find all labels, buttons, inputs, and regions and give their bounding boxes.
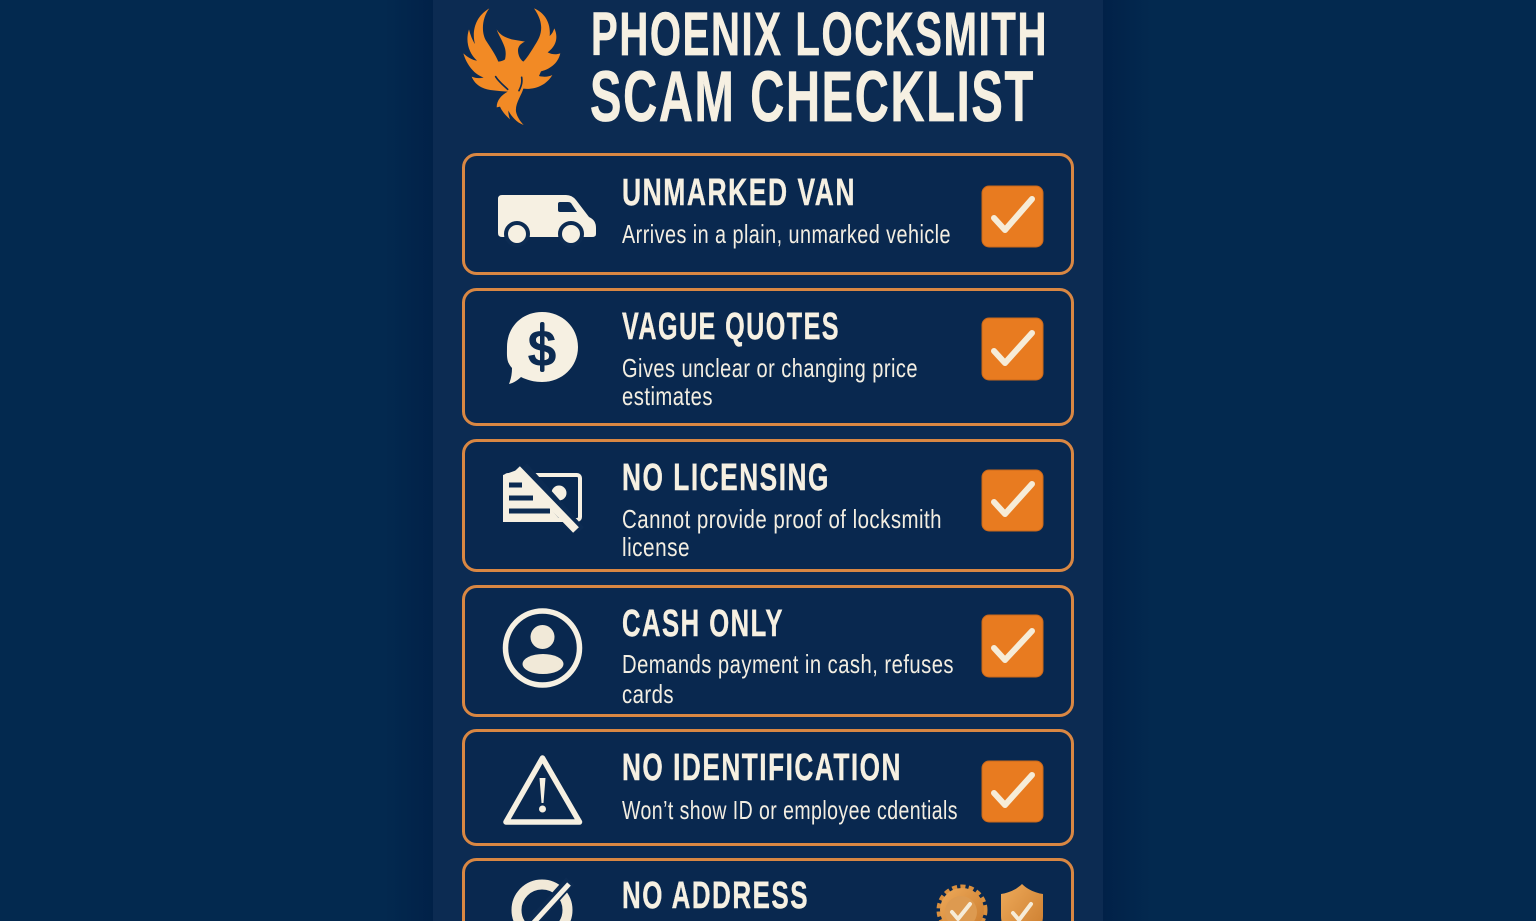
description: cash only: Demands payment in cash, refuses (622, 649, 954, 679)
description: no licensing: Cannot provide proof of locksmith (622, 504, 942, 534)
description: vague quotes: estimates (622, 381, 713, 411)
icon: crossed out license card (503, 466, 581, 530)
panel: unmarked van (464, 154, 1072, 274)
description: no identification: Won’t show ID or employee cdentials (622, 795, 958, 825)
checkbox: no licensing (982, 470, 1043, 531)
badge: shield with check (1001, 884, 1043, 921)
checkbox: no identification (982, 761, 1043, 822)
icon: person in circle (506, 611, 580, 685)
heading: no address: NO ADDRESS (622, 875, 809, 917)
heading: cash only: CASH ONLY (622, 603, 784, 645)
title: PHOENIX LOCKSMITH (591, 0, 1048, 68)
panel: cash only (464, 586, 1072, 716)
description: unmarked van: Arrives in a plain, unmarked vehicle (622, 219, 951, 249)
panel: vague quotes (464, 290, 1072, 424)
description: cash only (622, 649, 954, 709)
description: vague quotes (622, 353, 918, 411)
title: SCAM CHECKLIST (590, 58, 1035, 137)
checkbox: vague quotes (982, 318, 1043, 380)
icon: warning triangle (506, 758, 580, 822)
checkbox: unmarked van (982, 186, 1043, 247)
heading: vague quotes: VAGUE QUOTES (622, 306, 840, 348)
heading: unmarked van: UNMARKED VAN (622, 172, 856, 214)
panel: no licensing (464, 440, 1072, 570)
icon: speech bubble with dollar sign: $ (528, 320, 557, 378)
panel: no identification (464, 730, 1072, 844)
heading: no identification: NO IDENTIFICATION (622, 747, 902, 789)
badge: rosette with check (939, 887, 985, 921)
heading: no licensing: NO LICENSING (622, 457, 830, 499)
description: no licensing (622, 504, 942, 562)
icon: van (498, 195, 596, 245)
icon: crossed out circle (516, 881, 570, 921)
description: cash only: cards (622, 679, 674, 709)
panel: no address (464, 860, 1072, 921)
description: vague quotes: Gives unclear or changing price (622, 353, 918, 383)
title (590, 0, 1048, 137)
center panel (433, 0, 1103, 921)
icon: phoenix logo (463, 8, 560, 125)
description: no licensing: license (622, 532, 690, 562)
icon: speech bubble with dollar sign (507, 312, 578, 384)
checkbox: cash only (982, 615, 1043, 677)
